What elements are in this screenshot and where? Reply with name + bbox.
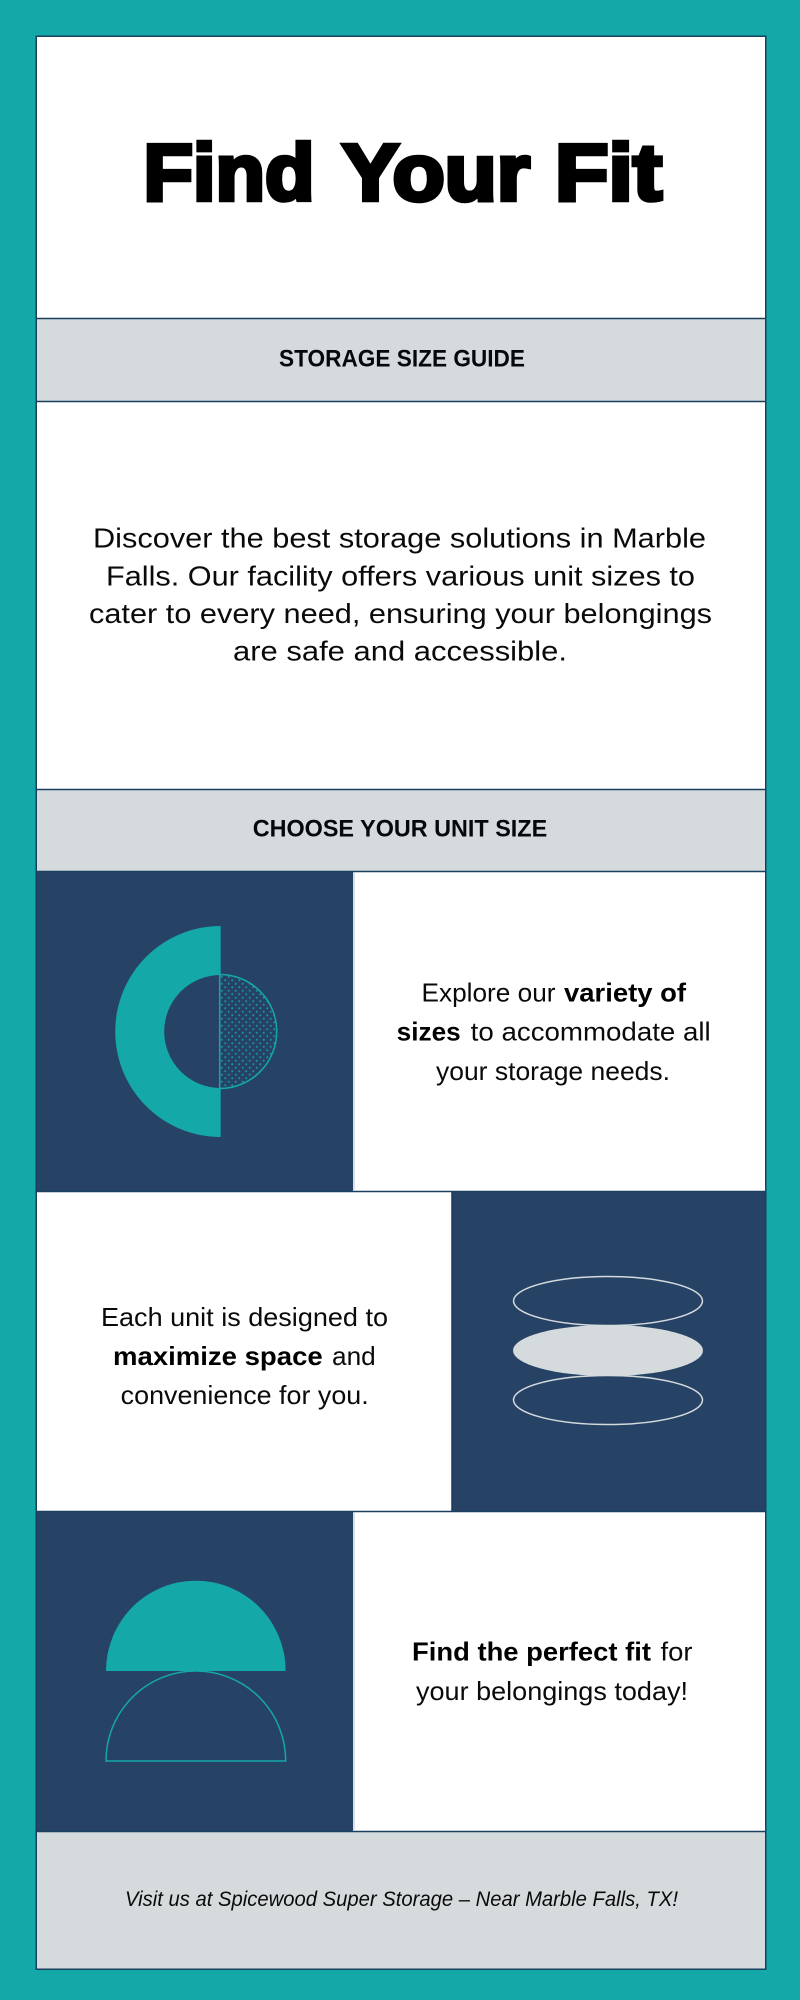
- text block: perfect fit: your belongings today!: [416, 1676, 688, 1706]
- heading: choose your unit size: CHOOSE YOUR UNIT SIZE: [253, 816, 547, 843]
- icon: bottom outlined ellipse: [514, 1376, 702, 1424]
- title: Your: [342, 128, 530, 217]
- text block: maximize space: maximize space: [113, 1341, 323, 1371]
- icon: dotted half circle: [220, 974, 277, 1088]
- text block: maximize space: and: [332, 1341, 376, 1371]
- panel: variety of sizes: [36, 872, 766, 1192]
- text block: variety of sizes: your storage needs.: [436, 1056, 670, 1086]
- footer text: Visit us at Spicewood Super Storage – Near Marble Falls, TX!: [125, 1888, 678, 1911]
- graphic panel: half discs: [36, 1512, 353, 1832]
- text block: maximize space: Each unit is designed to: [101, 1302, 388, 1332]
- panel: choose your unit size band: [36, 789, 766, 872]
- icon: half ring: [115, 926, 221, 1137]
- icon: outlined half disc: [106, 1671, 286, 1761]
- text block: introduction: Discover the best storage solutions in Marble: [93, 523, 706, 554]
- panel: storage size guide band: [36, 319, 766, 402]
- text block: perfect fit: [412, 1637, 693, 1706]
- text block: variety of sizes: variety of: [564, 978, 686, 1008]
- panel: title: [36, 36, 766, 319]
- text block: perfect fit: Find the perfect fit: [412, 1637, 651, 1667]
- icon: top outlined ellipse: [514, 1276, 702, 1326]
- panel: footer: [36, 1832, 766, 1969]
- panel: maximize space: [36, 1192, 766, 1512]
- text block: variety of sizes: Explore our: [422, 978, 556, 1008]
- text block: introduction: are safe and accessible.: [233, 636, 567, 667]
- icon: filled middle ellipse: [513, 1325, 703, 1376]
- panel: perfect fit: [36, 1512, 766, 1832]
- icon: filled half disc: [106, 1581, 286, 1671]
- text block: maximize space: convenience for you.: [121, 1380, 369, 1410]
- text block: introduction: cater to every need, ensuring your belongings: [89, 598, 712, 629]
- text block: perfect fit: for: [660, 1637, 693, 1667]
- heading: storage size guide: STORAGE SIZE GUIDE: [279, 346, 525, 373]
- title: Find: [144, 128, 314, 217]
- graphic panel: ring shape: [36, 872, 353, 1192]
- text block: introduction: Falls. Our facility offers various unit sizes to: [106, 560, 695, 591]
- text block: maximize space: [101, 1302, 388, 1410]
- title: Fit: [555, 128, 662, 217]
- text block: introduction: [89, 523, 712, 667]
- text block: variety of sizes: to accommodate all: [471, 1017, 711, 1047]
- title: [144, 128, 662, 217]
- text block: variety of sizes: sizes: [397, 1017, 461, 1047]
- graphic panel: stacked ellipses: [452, 1192, 766, 1511]
- text block: variety of sizes: [397, 978, 711, 1086]
- panel: introduction: [36, 402, 766, 789]
